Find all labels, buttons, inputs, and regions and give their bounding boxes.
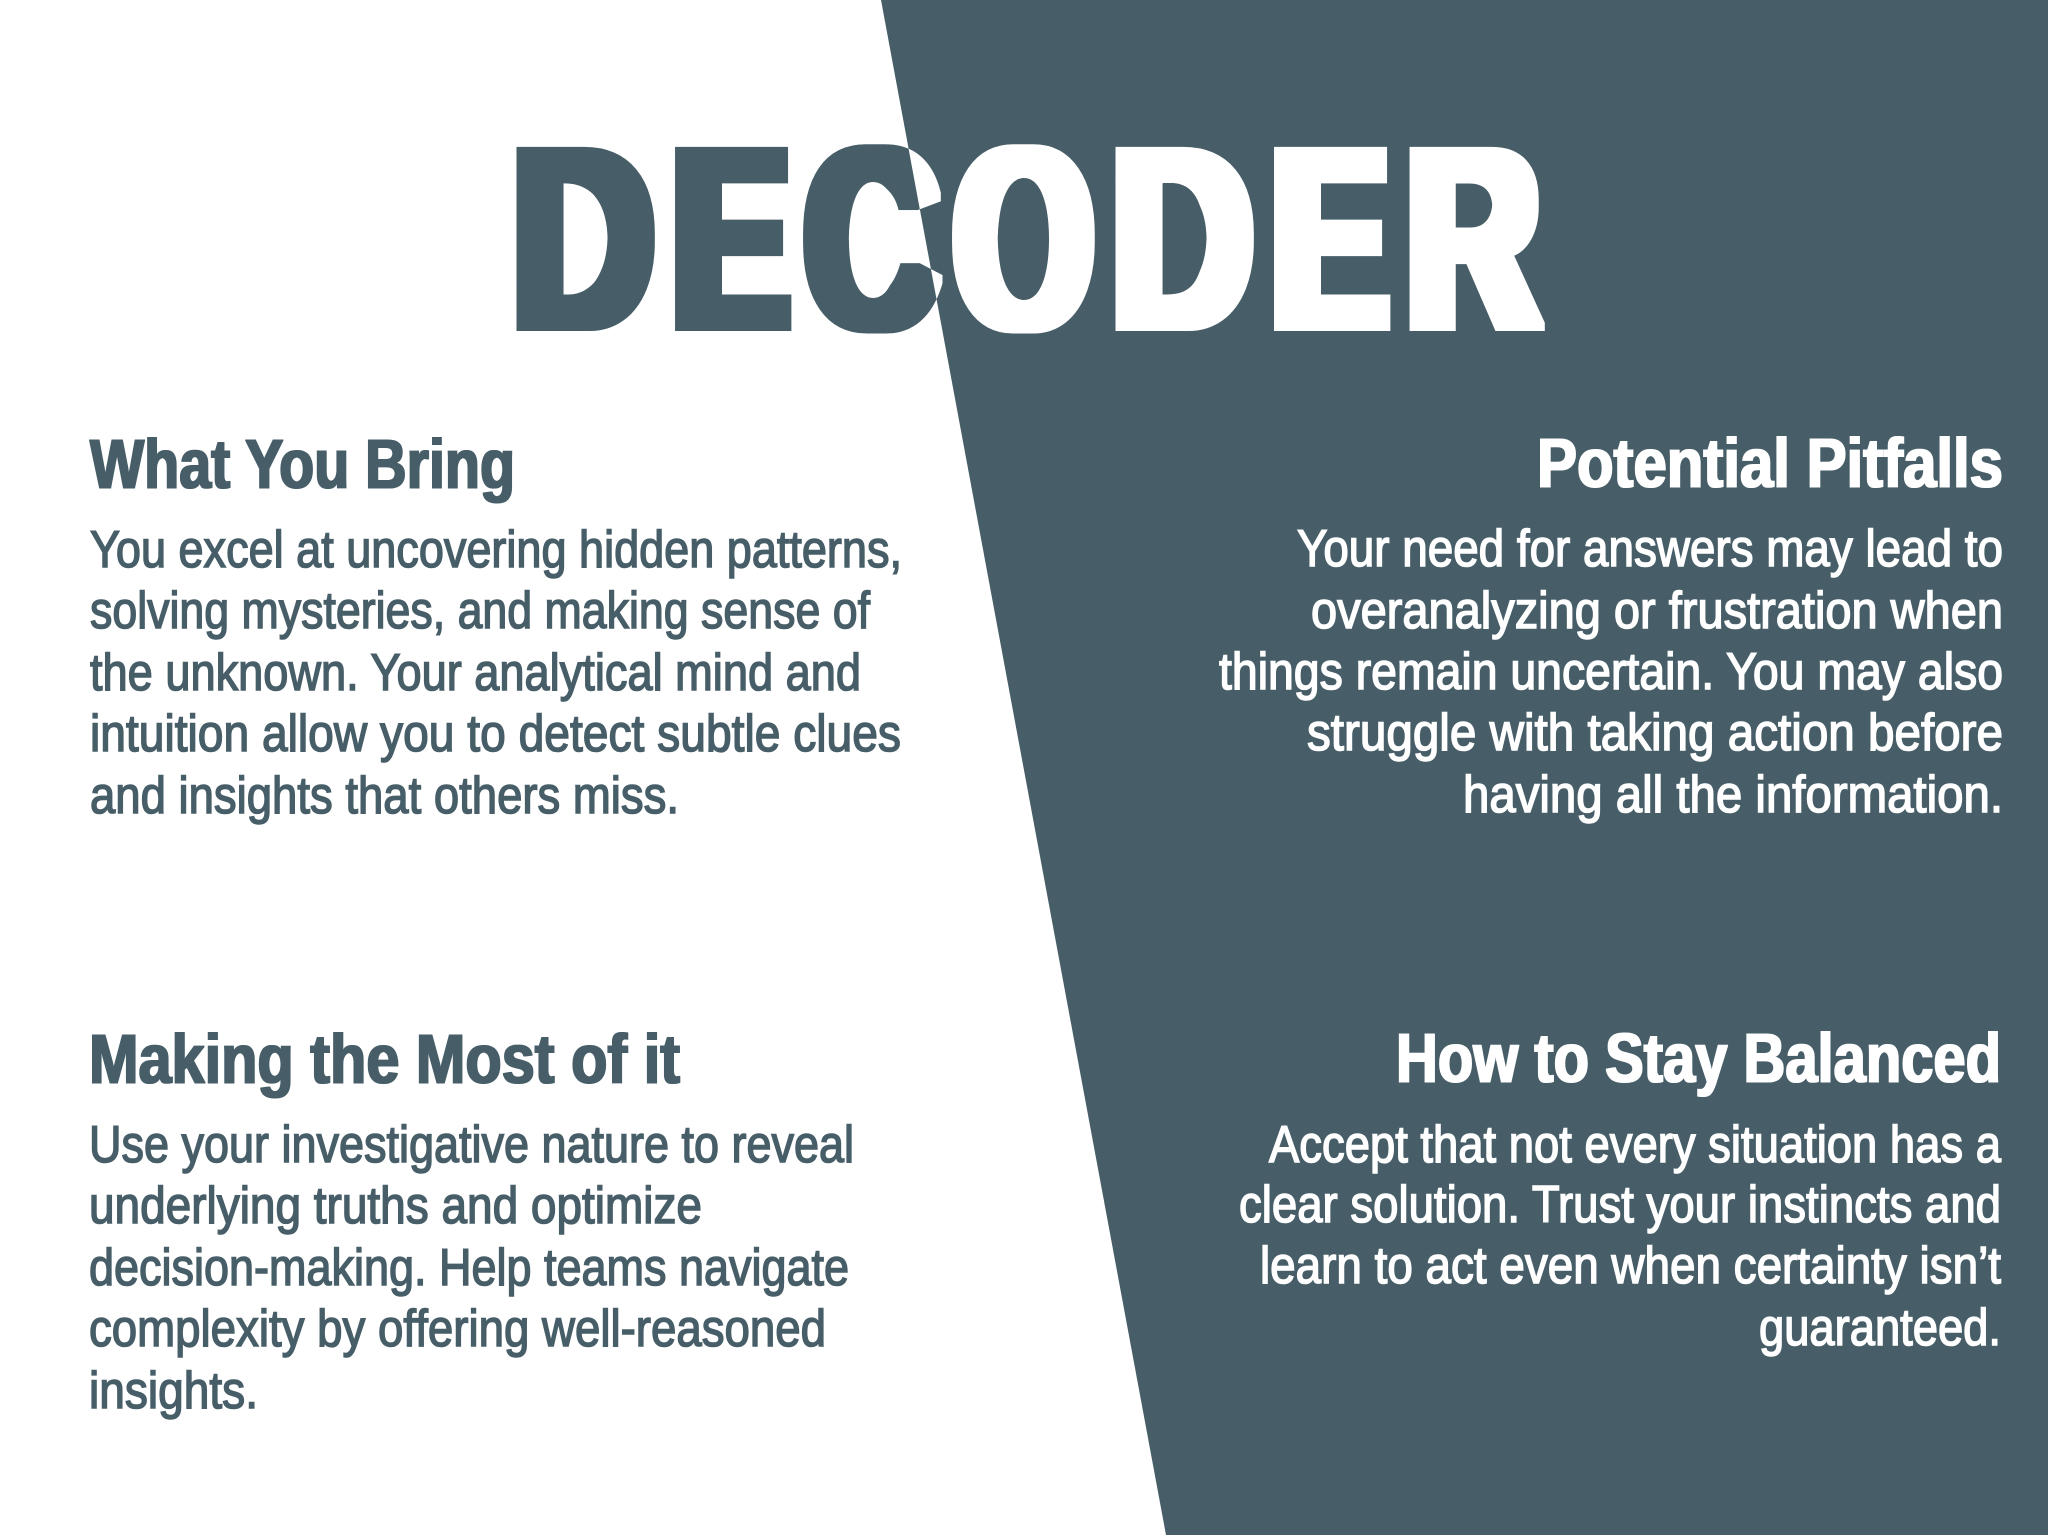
heading: What You Bring: What You Bring [90, 425, 515, 503]
body text: Making the Most of it: complexity by offering well-reasoned [89, 1300, 826, 1358]
body text: Potential Pitfalls: struggle with taking action before [1307, 704, 2003, 762]
body text: Making the Most of it: underlying truths and optimize [89, 1177, 702, 1235]
title: DECODER: E [1274, 96, 1385, 382]
body text: What You Bring: and insights that others miss. [90, 767, 679, 825]
body text: What You Bring: intuition allow you to detect subtle clues [90, 705, 901, 763]
body text: How to Stay Balanced: guaranteed. [1759, 1299, 2001, 1357]
title: DECODER: C [805, 96, 938, 382]
title: DECODER: O [955, 95, 1092, 382]
title: DECODER: C [805, 96, 938, 382]
body text: Potential Pitfalls [1219, 520, 2003, 824]
panel: Making the Most of it [89, 1020, 854, 1420]
body text: What You Bring: the unknown. Your analytical mind and [90, 644, 861, 702]
body text: What You Bring [90, 521, 902, 825]
title: DECODER: R [1407, 96, 1539, 382]
panel: How to Stay Balanced [1239, 1019, 2001, 1357]
body text: Making the Most of it: insights. [89, 1362, 258, 1420]
body text: Making the Most of it: Use your investigative nature to reveal [89, 1116, 854, 1174]
dark slanted panel [881, 0, 2048, 1535]
body text: Potential Pitfalls: having all the information. [1463, 766, 2003, 824]
title: DECODER: D [513, 96, 654, 382]
body text: How to Stay Balanced [1239, 1116, 2001, 1357]
title: DECODER: D [1112, 96, 1253, 382]
heading: Making the Most of it: Making the Most of it [89, 1020, 680, 1098]
title: DECODER [516, 144, 1545, 334]
panel: Potential Pitfalls [1219, 424, 2003, 824]
title: DECODER: E [675, 96, 786, 382]
body text: What You Bring: You excel at uncovering hidden patterns, [90, 521, 902, 579]
panel: What You Bring [90, 425, 902, 825]
body text: What You Bring: solving mysteries, and making sense of [90, 582, 870, 640]
body text: Making the Most of it [89, 1116, 854, 1420]
body text: Making the Most of it: decision-making. Help teams navigate [89, 1239, 849, 1297]
